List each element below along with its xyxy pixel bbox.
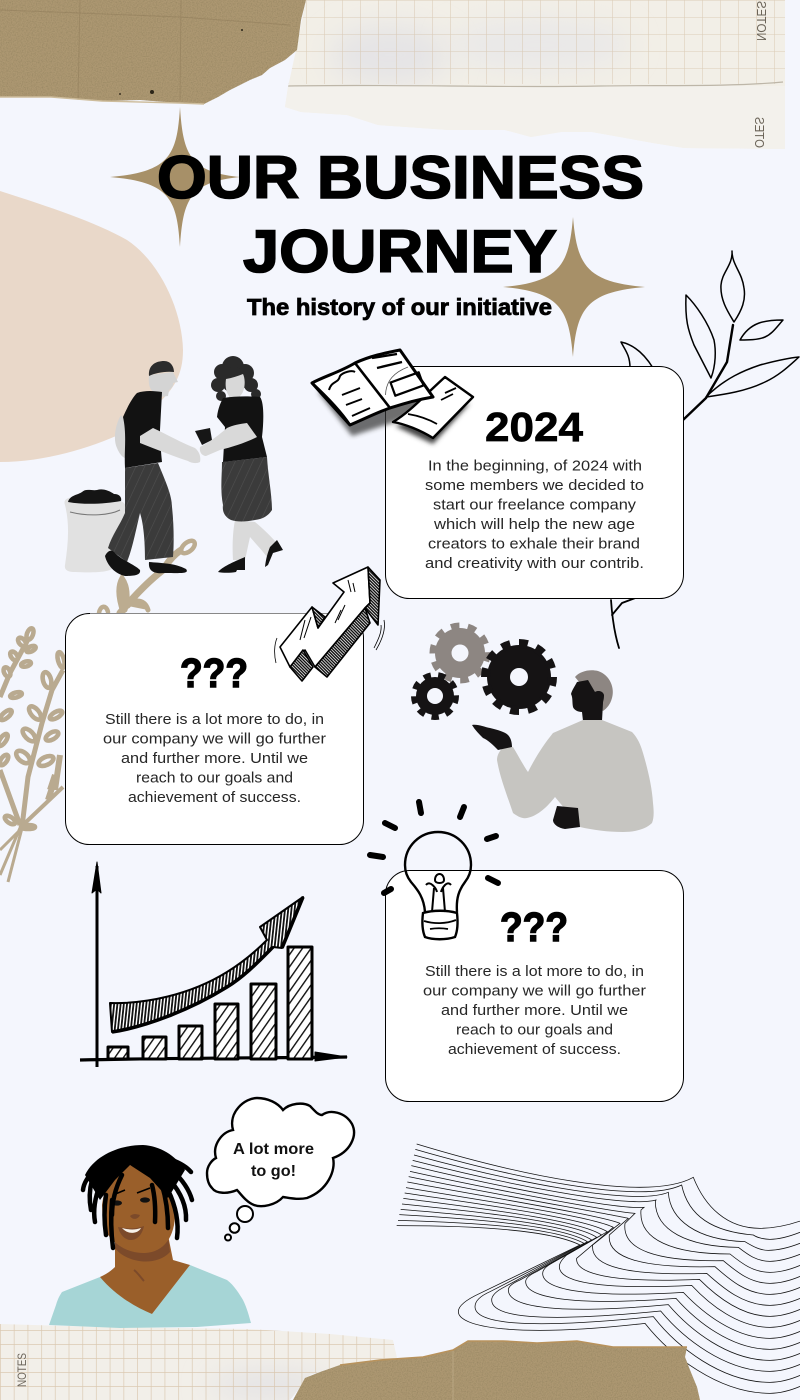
body text: creators to exhale their brand bbox=[428, 536, 640, 552]
body text: and further more. Until we bbox=[121, 751, 308, 767]
body text: Still there is a lot more to do, in bbox=[105, 712, 324, 728]
speech bubble bbox=[207, 1098, 354, 1240]
title: OUR BUSINESS bbox=[157, 144, 644, 211]
body text: reach to our goals and bbox=[136, 770, 293, 786]
illustration: smiling man bbox=[49, 1145, 251, 1328]
bubble text: A lot more bbox=[233, 1141, 314, 1158]
card: future left bbox=[66, 614, 364, 844]
body text: our company we will go further bbox=[423, 984, 646, 1000]
beige background blob bbox=[0, 191, 183, 462]
body text: Still there is a lot more to do, in bbox=[425, 964, 644, 980]
NOTES label: NOTES bbox=[15, 1353, 29, 1387]
icon: open books bbox=[312, 350, 473, 444]
man bbox=[115, 415, 135, 458]
OTES label mirrored: OTES bbox=[752, 117, 766, 148]
hair bbox=[83, 1145, 192, 1248]
body text: reach to our goals and bbox=[456, 1022, 613, 1038]
title bbox=[157, 144, 644, 285]
woman bbox=[211, 356, 261, 401]
star: left bbox=[110, 107, 240, 247]
body text bbox=[423, 964, 646, 1058]
bubble text: to go! bbox=[251, 1163, 296, 1180]
icon: up arrow bbox=[275, 567, 385, 681]
illustration: thinking person bbox=[472, 670, 654, 832]
line-art branch: right bbox=[611, 251, 799, 648]
subtitle: The history of our initiative bbox=[247, 294, 552, 320]
illustration: people handshake bbox=[64, 356, 283, 576]
body text: and creativity with our contrib. bbox=[425, 556, 644, 572]
tan plant: left side bbox=[0, 627, 66, 882]
title: JOURNEY bbox=[243, 218, 557, 285]
body text bbox=[103, 712, 326, 806]
body text bbox=[425, 458, 644, 572]
wave line art: bottom right bbox=[397, 1144, 800, 1393]
body text: start our freelance company bbox=[433, 498, 637, 514]
body text: achievement of success. bbox=[448, 1042, 621, 1058]
body text: and further more. Until we bbox=[441, 1003, 628, 1019]
body text: achievement of success. bbox=[128, 790, 301, 806]
year heading: 2024 bbox=[485, 404, 583, 450]
bubble text bbox=[233, 1141, 314, 1180]
icon: light bulb bbox=[370, 802, 498, 939]
question marks heading: ??? bbox=[500, 904, 568, 950]
torn kraft paper: bottom bbox=[293, 1341, 700, 1400]
torn graph paper: bottom bbox=[0, 1320, 400, 1400]
icon: gears bbox=[414, 627, 552, 716]
body text: our company we will go further bbox=[103, 732, 326, 748]
tan sprig: behind lower card bbox=[99, 538, 197, 613]
torn graph paper: top bbox=[280, 0, 790, 150]
body text: some members we decided to bbox=[425, 478, 644, 494]
sack bbox=[64, 497, 127, 572]
star: right bbox=[503, 217, 645, 357]
card: 2024 bbox=[386, 366, 684, 598]
torn kraft paper: top bbox=[0, 0, 306, 104]
question marks heading: ??? bbox=[180, 650, 248, 696]
card: future right bbox=[386, 870, 684, 1102]
chart: rising bars with arrow bbox=[80, 862, 347, 1067]
body text: which will help the new age bbox=[433, 517, 635, 533]
body text: In the beginning, of 2024 with bbox=[428, 458, 642, 474]
